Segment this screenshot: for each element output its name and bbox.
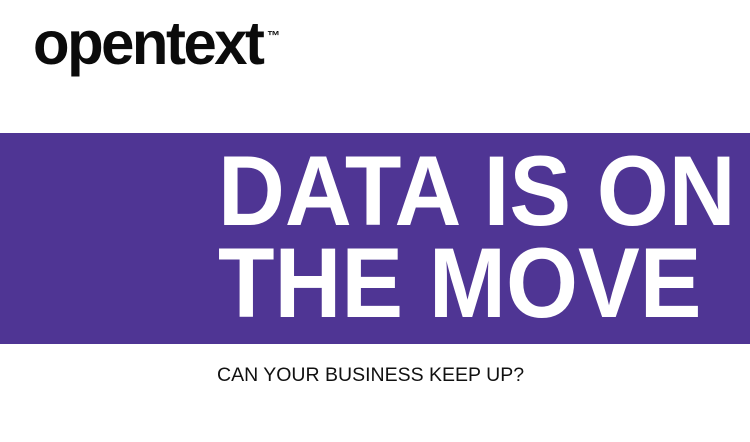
logo: opentext: ™: [267, 28, 280, 43]
title: THE MOVE: [218, 227, 701, 338]
title: DATA IS ON: [218, 135, 736, 246]
purple banner: [0, 133, 750, 344]
subtitle: CAN YOUR BUSINESS KEEP UP?: [217, 364, 524, 386]
title: [218, 135, 736, 338]
logo: opentext: opentext: [33, 9, 263, 77]
